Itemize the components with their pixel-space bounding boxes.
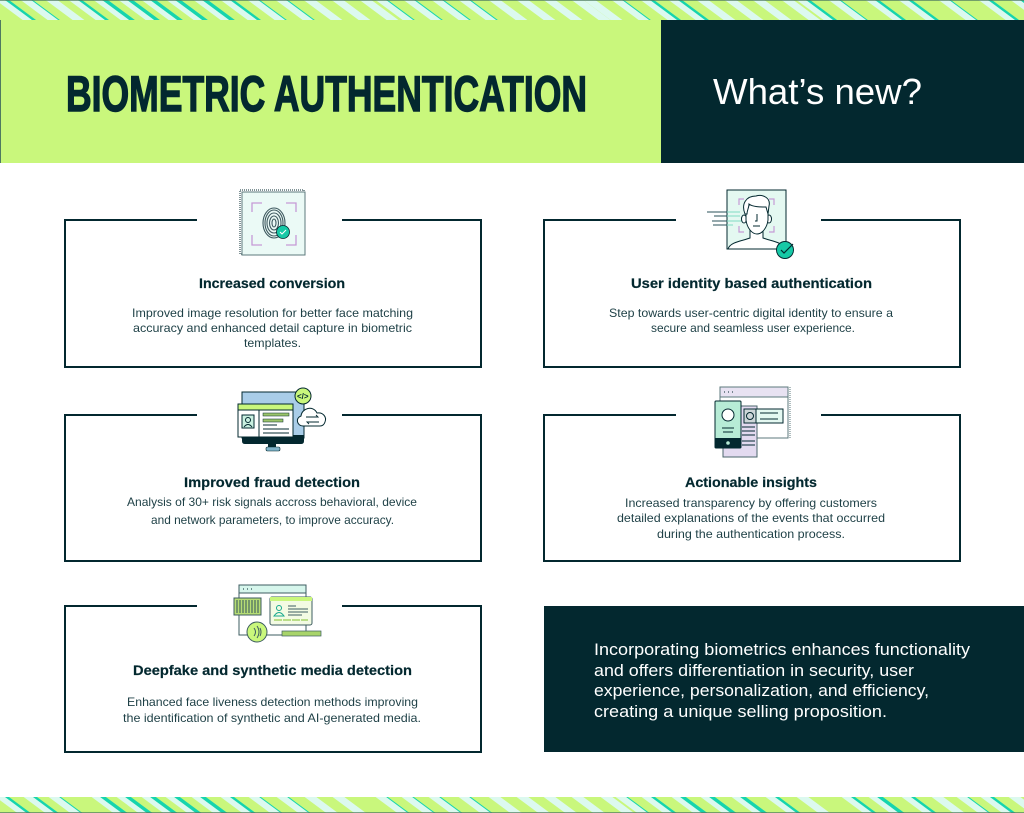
icon: phone and browser: [715, 387, 790, 457]
description: templates.: [244, 336, 301, 350]
description: Increased transparency by offering customers: [625, 496, 877, 510]
title: BIOMETRIC AUTHENTICATION: [66, 66, 587, 122]
subtitle: What’s new?: [713, 71, 922, 112]
description: Improved image resolution for better face matching: [132, 306, 413, 320]
card: actionable insights: [544, 387, 960, 561]
heading: Actionable insights: [685, 474, 817, 490]
description: and network parameters, to improve accuracy.: [151, 513, 394, 527]
callout: summary: experience, personalization, and efficiency,: [594, 681, 929, 700]
description: accuracy and enhanced detail capture in biometric: [133, 321, 412, 335]
heading: Increased conversion: [199, 275, 345, 291]
bottom striped band: [0, 797, 1024, 813]
callout: summary: [544, 606, 1024, 752]
card: improved fraud detection: [65, 388, 481, 561]
callout: summary: Incorporating biometrics enhances functionality: [594, 640, 971, 659]
header panel: title: [0, 20, 661, 163]
description: Analysis of 30+ risk signals accross behavioral, device: [127, 495, 417, 509]
card: deepfake detection: [65, 585, 481, 752]
icon: monitor with cloud: [238, 388, 326, 451]
heading: Deepfake and synthetic media detection: [133, 662, 412, 678]
description: Enhanced face liveness detection methods improving: [127, 695, 418, 709]
icon: fingerprint: [240, 190, 305, 255]
icon: face scan: [707, 190, 794, 258]
icon: barcode and id window: [234, 585, 321, 642]
description: detailed explanations of the events that occurred: [617, 511, 885, 525]
card: increased conversion: [65, 190, 481, 367]
description: [127, 495, 417, 527]
callout: summary: creating a unique selling proposition.: [594, 702, 887, 721]
description: [123, 695, 421, 725]
heading: Improved fraud detection: [184, 474, 360, 490]
header panel: what's new: [661, 20, 1024, 163]
description: Step towards user-centric digital identity to ensure a: [609, 306, 893, 320]
heading: User identity based authentication: [631, 275, 872, 291]
icon: monitor with cloud: </>: [297, 392, 309, 401]
callout: summary: and offers differentiation in security, user: [594, 661, 914, 680]
description: secure and seamless user experience.: [651, 321, 855, 335]
top striped band: [0, 0, 1024, 20]
card: user identity: [544, 190, 960, 367]
description: [132, 306, 413, 350]
description: [617, 496, 885, 541]
description: the identification of synthetic and AI-generated media.: [123, 711, 421, 725]
description: during the authentication process.: [657, 527, 845, 541]
description: [609, 306, 893, 335]
